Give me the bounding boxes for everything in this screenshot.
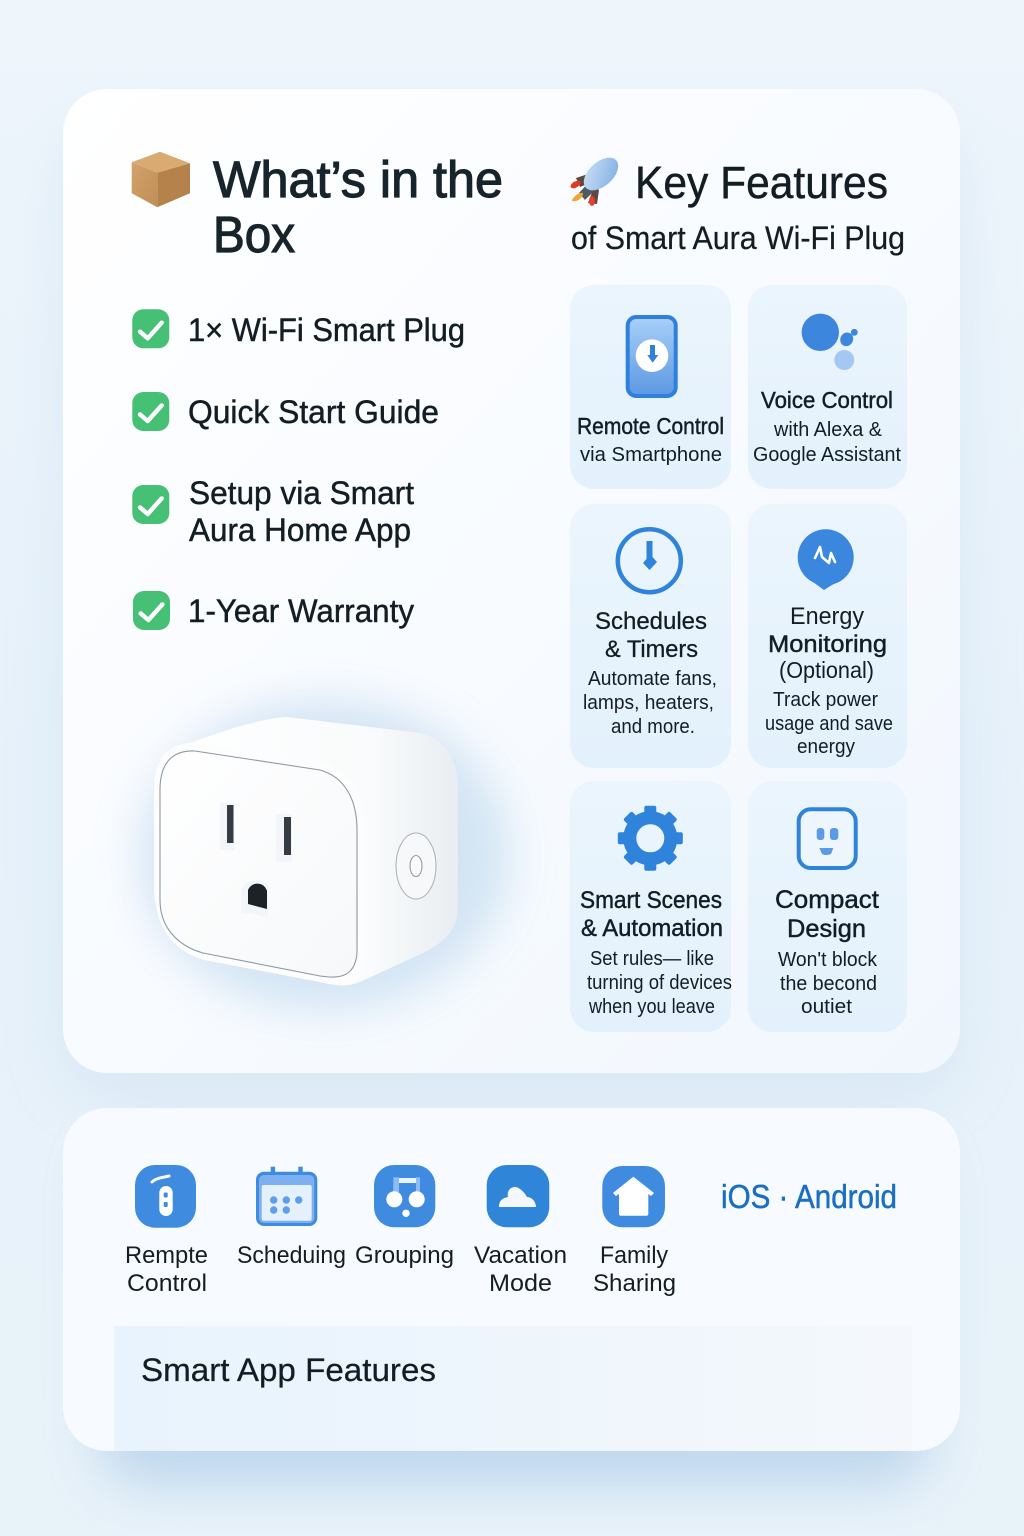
card text: Won't block [778,949,878,971]
icon: cardboard box [132,152,190,207]
icon: phone [628,317,676,396]
app feature: grouping [355,1165,454,1269]
card text: & Timers [605,636,698,663]
app feature: scheduling [237,1167,346,1269]
card text [580,887,732,1018]
icon: rocket [569,151,624,206]
card text: Set rules— like [590,948,714,970]
card text: outiet [801,996,852,1018]
section: key features [569,151,907,1032]
subheading: of Smart Aura Wi-Fi Plug [571,220,905,256]
icon: gear [618,806,683,871]
app feature: remote control: Control [127,1270,207,1297]
app feature: remote control [125,1165,208,1297]
card text: Smart Scenes [580,887,722,914]
app feature: remote control: Rempte [125,1242,208,1269]
icon: energy pin [798,529,854,590]
card text [765,603,893,758]
card text: Schedules [595,608,707,635]
card text: & Automation [581,915,723,942]
product photo: smart plug [154,717,458,986]
heading: what's in the box: Box [213,206,295,263]
app feature: family sharing: Sharing [593,1270,676,1297]
item: setup via app: Aura Home App [189,512,411,548]
card: remote control [570,285,731,489]
app feature: grouping: Grouping [355,1242,454,1269]
panel: smart app features [63,1108,960,1451]
card text: (Optional) [779,657,874,683]
card text: Monitoring [768,631,887,658]
heading: key features: Key Features [635,157,888,208]
item: quick start guide: Quick Start Guide [188,394,439,430]
card text: Google Assistant [753,444,901,466]
item: warranty: 1-Year Warranty [188,593,414,629]
heading: what's in the box: What’s in the [213,151,503,208]
item: setup via app: Setup via Smart [189,475,414,511]
icon: clock [618,529,681,592]
card text: the becond [780,973,877,995]
platforms: iOS and Android: iOS · Android [721,1178,897,1215]
card text: energy [797,736,855,758]
app feature: vacation mode: Mode [489,1270,552,1297]
card text: Remote Control [577,413,724,439]
item: setup via app [132,475,414,548]
card text [577,413,724,466]
card text: Design [787,915,866,943]
checklist [132,309,465,630]
card text: Compact [775,886,879,914]
card text: when you leave [588,996,715,1018]
card: schedules and timers [570,504,731,768]
card text [753,387,901,466]
card text: turning of devices [587,972,732,994]
card text [775,886,879,1018]
card text: via Smartphone [580,444,722,466]
card text: usage and save [765,713,893,735]
card text: Track power [773,689,878,711]
item: smart plug: 1× Wi-Fi Smart Plug [188,312,465,348]
icon: outlet [799,809,856,868]
app feature: scheduling: Scheduing [237,1242,346,1269]
card text: Energy [790,603,864,630]
app feature: vacation mode [474,1165,567,1297]
card text: with Alexa & [773,419,883,441]
app feature: family sharing [593,1166,676,1297]
icon: voice assistant dots [802,314,858,370]
card text [583,608,717,738]
footer band: smart app features: Smart App Features [141,1352,436,1388]
card: smart scenes [570,781,732,1032]
card text: Automate fans, [588,668,717,690]
footer band: smart app features [114,1326,912,1451]
card text: Voice Control [761,387,893,413]
card: voice control [748,285,907,489]
heading: what's in the box [213,151,503,263]
card: energy monitoring [748,504,907,768]
section: what's in the box [132,151,503,630]
card text: and more. [611,716,695,738]
app feature: vacation mode: Vacation [474,1242,567,1269]
card: compact design [748,781,907,1032]
card text: lamps, heaters, [583,692,714,714]
app feature: family sharing: Family [600,1242,668,1269]
panel: main card [63,89,960,1073]
